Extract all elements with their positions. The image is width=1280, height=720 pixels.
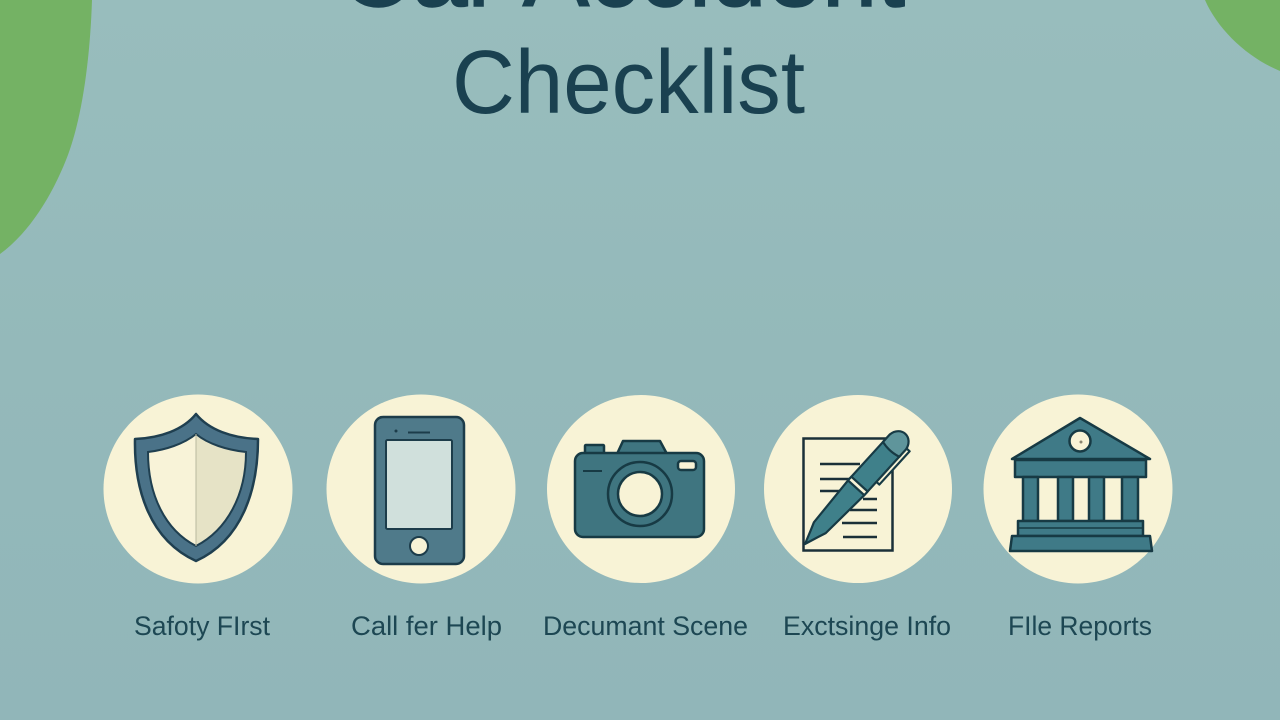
label: Safoty FIrst [134,611,270,641]
icon: camera [575,441,704,537]
icon circle [547,395,735,583]
step 1: safety first [104,394,292,641]
step 4: exchange info [764,395,952,641]
title line 2: Checklist [452,33,805,133]
icon: phone [375,417,464,564]
icon: shield [135,414,258,561]
step 5: file reports [984,394,1172,641]
icon circle [326,394,516,584]
label: Exctsinge Info [783,611,951,641]
green blob: top right [1205,0,1280,71]
green blob: top left [0,0,92,254]
step 2: call for help [326,394,516,641]
icon circle [764,395,952,583]
step 3: document scene [543,395,748,641]
icon circle [104,394,292,584]
icon: courthouse [1010,418,1152,551]
icon: document and pen [797,426,916,554]
label: Call fer Help [351,611,502,641]
title [340,0,905,133]
label: FIle Reports [1008,611,1152,641]
icon circle [984,394,1172,584]
label: Decumant Scene [543,611,748,641]
